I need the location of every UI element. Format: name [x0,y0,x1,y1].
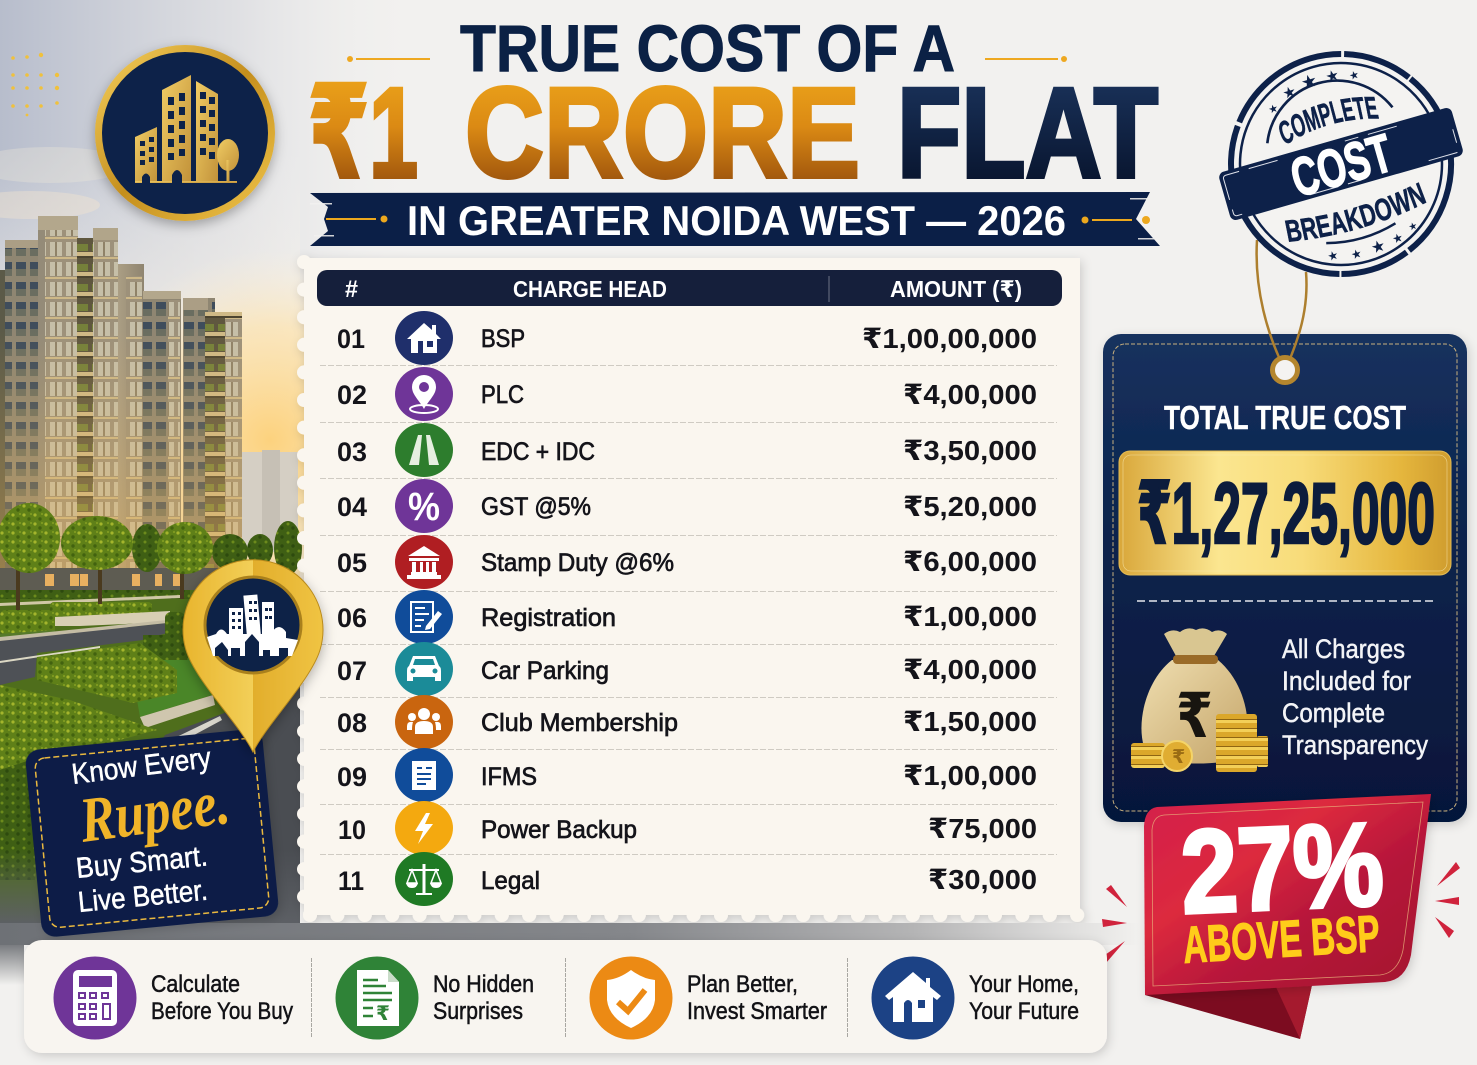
amounts: ₹5,20,000 [903,491,1037,522]
stamp stars top: ★ [1267,102,1280,117]
benefit text three [687,971,827,1025]
bottom benefits bar [24,940,1107,1053]
icon: road [395,423,453,477]
icon: house [395,311,453,365]
icon: club members [395,695,453,749]
row numbers: 11 [338,866,364,896]
charge head labels: IFMS [481,763,537,791]
icon: legal scales [395,852,453,906]
apartment towers [0,216,298,592]
stamp word complete: COMPLETE [1279,96,1379,144]
heading line one: TRUE COST OF A [460,11,955,85]
row dividers [320,366,1057,854]
charge head labels: Club Membership [481,709,678,737]
tag rope [1257,240,1307,366]
stamp stars bottom: ★ [1326,248,1340,264]
amounts: ₹1,50,000 [903,706,1037,737]
stamp stars bottom: ★ [1407,221,1419,234]
callout: 27 percent above BSP [1144,794,1431,1039]
charge head labels: PLC [481,381,524,409]
know every rupee card [25,728,279,938]
row numbers: 01 [337,324,365,354]
row numbers: 02 [337,380,367,410]
amounts: ₹1,00,000 [903,760,1037,791]
icon: money bag and coins: ₹ [1172,747,1185,768]
stamp stars bottom: ★ [1369,237,1388,258]
benefit text two: Surprises [433,998,523,1025]
ribbon fold [1145,985,1312,1039]
know every rupee card: Live Better. [77,875,209,919]
gold total plate [1119,451,1451,575]
icon: calculator [54,956,136,1040]
heading line two gold: CRORE [465,62,860,205]
table header [317,270,1062,306]
stamp stars top: ★ [1324,66,1341,86]
know every rupee card: Rupee. [75,766,234,856]
benefit text four: Your Home, [969,971,1079,998]
icon: percent [395,479,453,533]
amounts: ₹4,00,000 [903,379,1037,410]
icon: document with rupee: ₹ [376,1003,390,1025]
benefit text four: Your Future [969,998,1079,1025]
tag caption: Complete [1282,698,1385,728]
row numbers: 09 [337,762,367,792]
stamp band: COST [1284,123,1399,209]
icon: city skyline [207,594,298,656]
stamp stars top: ★ [1348,69,1361,83]
title [308,11,1158,205]
row numbers: 07 [337,656,367,686]
icon: power bolt [395,801,453,855]
amounts: ₹30,000 [928,864,1037,895]
location pin [183,560,323,752]
benefit text two [433,971,534,1025]
charge head labels: Legal [481,867,540,895]
charge head labels: Power Backup [481,816,637,844]
icon: car [395,642,453,696]
decorative gold rules [347,56,1067,62]
stamp band [1217,104,1466,228]
icon: home [872,956,954,1040]
icon: shield check [590,956,672,1040]
tag caption: All Charges [1282,634,1405,664]
benefit text three: Plan Better, [687,971,798,998]
row numbers: 04 [337,492,367,522]
amounts: ₹3,50,000 [903,435,1037,466]
know every rupee card: Know Every [70,742,213,791]
amounts: ₹1,00,00,000 [862,323,1037,354]
know every rupee card: Buy Smart. [75,840,209,885]
bottom shadow strip [0,923,1140,985]
icon: IFMS clipboard [395,748,453,802]
heading line two gold [308,62,860,205]
row numbers [337,324,367,896]
row numbers: 10 [338,815,366,845]
stamp word breakdown: BREAKDOWN [1284,182,1426,242]
amounts: ₹75,000 [928,813,1037,844]
stamp stars bottom: ★ [1391,230,1405,246]
icon: registration form [395,590,453,644]
table header: # [345,276,358,303]
street scene [0,590,300,925]
benefit text four [969,971,1079,1025]
stamp: complete cost breakdown [1219,51,1463,277]
benefit text one: Calculate [151,971,240,998]
benefit text one [151,971,293,1025]
icon: money bag and coins [1131,628,1268,772]
icon: money bag and coins: ₹ [1176,682,1213,751]
charge head labels: GST @5% [481,493,591,521]
logo badge [95,45,275,221]
charge head labels: Registration [481,604,616,632]
eyelet ring [1272,358,1298,382]
charge head labels: Stamp Duty @6% [481,549,674,577]
icon: percent: % [408,485,440,529]
benefit text two: No Hidden [433,971,534,998]
benefit text one: Before You Buy [151,998,293,1025]
table header: CHARGE HEAD [513,276,667,302]
total cost tag [1103,334,1467,822]
row numbers: 03 [337,437,367,467]
gold dot pattern [11,53,59,116]
ledger table panel [304,258,1080,915]
row numbers: 08 [337,708,367,738]
row numbers: 06 [337,603,367,633]
amounts: ₹4,00,000 [903,654,1037,685]
charge head labels: Car Parking [481,657,609,685]
stamp stars top: ★ [1299,70,1320,93]
row numbers: 05 [337,548,367,578]
trees [0,503,302,610]
heading line two gold: ₹1 [308,62,418,205]
callout: 27 percent above BSP: 27% [1178,798,1386,939]
icon: document with rupee [336,956,418,1040]
stamp stars bottom: ★ [1349,246,1364,262]
charge head labels: BSP [481,325,525,353]
stamp stars bottom [1325,221,1423,270]
callout sparks [1102,862,1460,963]
icon: bank [395,535,453,589]
charge head labels: EDC + IDC [481,438,595,466]
benefit text three: Invest Smarter [687,998,827,1025]
amounts: ₹1,00,000 [903,601,1037,632]
tag caption: Transparency [1282,730,1428,760]
icon: gold buildings [135,75,239,183]
icon: location pin [395,367,453,421]
heading line two navy: FLAT [897,62,1158,205]
amounts: ₹6,00,000 [903,546,1037,577]
stamp stars top [1261,58,1364,117]
ribbon face [1144,794,1431,995]
paper sheet [304,258,1080,915]
stamp stars top: ★ [1281,83,1298,103]
subtitle banner [310,192,1160,246]
table header: AMOUNT (₹) [890,276,1022,302]
charge head labels [481,325,678,895]
tag heading: TOTAL TRUE COST [1164,399,1406,436]
banner text: IN GREATER NOIDA WEST — 2026 [407,197,1066,244]
tag caption [1282,634,1428,760]
tag caption: Included for [1282,666,1411,696]
amounts [862,323,1037,895]
